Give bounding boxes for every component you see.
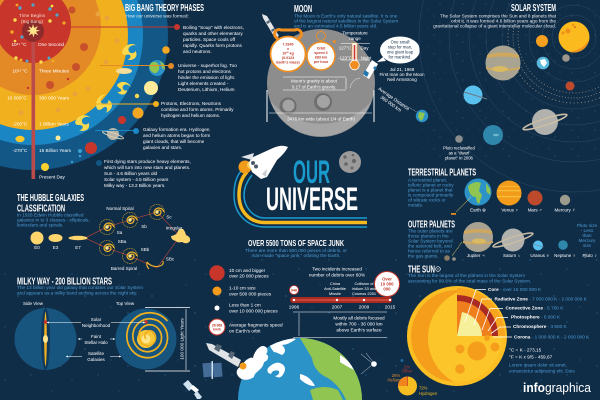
callout: moon gravity: 0.17 of Earth's gravity. [292,84,336,90]
text: solar system description: gravitational collapse of a giant interstellar molecular cloud. [433,24,556,28]
labels: Uranus ♅ [530,253,550,258]
labels: Saturn ♄ [503,253,521,258]
callout: debris altitude: Mostly all debris focused [333,316,385,320]
text: moon description [294,14,398,28]
icon: mass weight: 7.3349 [282,42,294,46]
legend: debris sizes: 1-10 cm size [229,286,256,290]
description: telluric planet or rocky [408,182,454,188]
text: phase two: hinder the emission of light. [178,75,235,80]
labels: Pluto ♇ [583,253,597,258]
timeline: debris incidents: number of debris over 60% [309,272,365,278]
text: moon description: of the largest natural satellites in the Solar System [294,18,398,24]
layer labels: Chromosphere - 3 800 K [513,324,568,329]
heading: milky way: MILKY WAY - 200 BILLION STARS [17,276,112,288]
pie: sun composition: Hydrogen [419,391,438,396]
timeline labels: (Big Bang) [21,19,44,24]
legend: debris sizes: 10 cm and bigger [229,268,266,273]
timeline labels: °C [20,42,27,47]
wordmark: OUR [293,154,330,190]
timeline: debris incidents: 2007 [332,304,343,310]
text: phase three: Protons, Electrons, Neutrons [161,101,222,106]
labels: Earth ⊕ [470,208,486,212]
pie: sun composition: 72% [419,386,428,390]
text: milky way description [17,285,143,296]
diagram: side view [14,301,76,370]
text: phase two [178,63,237,92]
wordmark: UNIVERSE [266,181,358,217]
description: hence referred to as [408,248,451,254]
layer labels: Convective Zone - 5 700 K [506,306,564,310]
legend: debris sizes: Less than 1 cm [229,302,261,308]
timeline labels: 10 [11,42,17,47]
description [408,273,531,284]
panel: big bang timeline circles [0,0,170,180]
heading: TERRESTRIAL PLANETS [408,168,476,178]
particles [10,3,119,115]
callout: fragment speed [209,319,283,335]
labels: Mercury ☿ [555,208,575,212]
thermometer: Night [361,56,372,60]
icon: satellite panels [202,361,223,379]
text: pluto note: Pluto reclassified [443,146,475,150]
timeline: debris incidents: Collision of [354,281,374,286]
diagram: tuning fork: SBa [118,239,127,244]
text: first man: Jul 21, 1969 [390,67,415,72]
icon: small moon [339,151,361,173]
dimension: moon width: 3476 km wide (about 1/4 of Earth) [287,116,355,122]
timeline bar [32,42,35,179]
callout: fragment speed: on Earth's orbit [229,328,261,334]
timeline: debris incidents: China [330,281,341,286]
sun cutaway diagram [407,286,512,386]
heading: solar system: SOLAR SYSTEM [511,3,556,14]
diagram: side view: Side View [23,301,44,306]
thermometer [338,30,372,70]
diagram: tuning fork [30,204,190,271]
moon body [267,29,375,137]
icon: orbit speed: Orbit [317,46,326,50]
formulas: °C = K - 273,15 [509,348,542,352]
timeline: debris incidents: Anti-Satellite [324,286,346,291]
diagram: tuning fork: Sb [141,224,147,229]
note: pluto size: size [583,243,592,248]
phase connector lines [70,24,180,166]
description: metals. [408,202,423,208]
timeline: debris incidents: 10 000 [380,282,394,286]
timeline: debris incidents: Missile [329,291,341,296]
text: space junk description: There are more than 500,000 pieces of debris, or [245,248,347,253]
icon: shuttle [238,146,288,179]
callouts: solar neighborhood, halo, satellite galaxies: Solar [91,317,102,322]
pie: sun composition: 26% [392,373,400,378]
text: phase five [104,159,191,188]
text: phase one: Boiling "Soup" with electrons, [183,25,244,30]
icon: mass weight: x [287,47,289,51]
layer labels: Photosphere - 6 000 K [511,314,561,320]
labels: Mars ♂ [528,208,542,212]
orbits [419,0,600,192]
timeline labels: 41 [17,42,20,46]
layer labels: Core - over 15 000 000 K [488,287,542,292]
text: phase four: galaxies and stars. [143,145,182,150]
callout: debris altitude: above Earth's surface [336,328,382,332]
pie: sun composition: Helium [387,378,401,382]
panel: moon [267,4,398,137]
labels [467,253,597,258]
text: first man: Neil Armstrong [387,77,417,82]
diagram: tuning fork: E3 [53,245,59,250]
diagram: tuning fork: E7 [75,245,81,250]
panel: milky way [14,276,190,371]
description: those planets in the [408,234,449,238]
icon: mass weight [270,30,306,72]
text: hubble description: In 1926 Edwin Hubble classified [17,212,84,218]
text: phase two: Light elements created - [178,81,229,86]
panel: solar system [419,0,600,192]
text: phase four: and helium atoms began to form [143,133,210,138]
description: The outer planets are [408,228,453,234]
legend: debris sizes: over 500 000 pieces [229,292,272,296]
diagram: tuning fork: Normal Spiral [106,206,134,211]
heading: big bang theory phases: BIG BANG THEORY PHASES [125,3,204,14]
timeline: debris incidents: Iridium 33 and [352,286,376,291]
timeline: debris incidents: 000 [383,286,391,292]
text: first man [379,67,425,82]
timeline labels: One Second [38,42,64,47]
timeline labels: 300 000 Years [39,96,70,100]
icon: orbit speed: per hour [314,60,329,64]
text: first man: First man on the Moon [379,72,425,77]
planets [444,222,586,261]
pie: sun composition: Other [402,368,413,374]
text: phase five: Solar system - 4.5 Billion years [104,177,169,182]
text: phase four: giant clouds, that will become [143,139,205,144]
formulas: Lorem ipsum dolor sit amet, [509,362,567,368]
labels [470,208,575,212]
callout: fragment speed: km/h [213,328,221,332]
text: milky way description: The 13 billion year old galaxy that contains our Solar System [17,285,143,290]
speech bubble: One small [391,40,409,44]
timeline labels: 1 Billion Years [39,122,69,126]
icon: satellite [183,380,202,399]
layer labels: Corona - 1 000 000 K - 2 000 000 K [514,334,590,340]
diagram: tuning fork: Irregular [166,226,183,230]
note: pluto size [577,223,598,248]
text: phase three [161,101,234,118]
callouts: solar neighborhood, halo, satellite galaxies: Galaxies [87,357,106,362]
layer labels: Radiative Zone - 7 000 000 K - 2 000 000 K [494,296,588,302]
timeline: debris incidents: 2015 [385,304,396,310]
text: phase one: and neutrons. [183,49,212,54]
heading: hubble: CLASSIFICATION [17,204,65,214]
text: phase one: quarks and other elementary [183,31,243,36]
panel: hubble classification [17,193,190,271]
callout: fragment speed: 28 968 [212,324,222,328]
icon: mass weight: (0.0123 [282,56,294,60]
text: phase four [143,127,210,150]
callouts: solar neighborhood, halo, satellite galaxies: Satellite [88,351,104,356]
description: of silicate rocks or [408,198,446,202]
description: accounting for 99.8% of the total mass of the Solar System. [408,278,531,284]
callout: debris altitude: within 700 - 36 000 km [335,322,383,326]
icon: sputnik [361,353,377,374]
heading: moon: MOON [294,4,312,15]
rocket trails [234,170,367,227]
text: pluto note: as a "dwarf [449,150,470,156]
asteroid belt [508,28,600,104]
heading: THE SUN [408,264,435,276]
note: pluto size: Mercury [579,238,596,243]
callouts: solar neighborhood, halo, satellite galaxies: Faint [91,334,102,339]
timeline labels: Present Day [39,174,66,180]
timeline labels: 12 [18,68,21,72]
description [408,228,453,258]
icon: mass weight: 10²² kg [282,52,294,56]
description: planet is a planet that [408,188,453,192]
legend: debris sizes [209,265,278,314]
labels: Venus ♀ [501,208,519,212]
heading: big bang theory phases [125,3,204,18]
sun [558,22,590,52]
heading: hubble [17,193,84,214]
text: space junk description: man-made "space junk," orbiting the Earth. [251,253,341,258]
timeline: debris incidents: 2009 [359,304,370,310]
diagram: top view [116,301,180,370]
callouts: solar neighborhood, halo, satellite galaxies: Stellar Halo [84,340,108,345]
text: phase five: which will turn into new stars and planets. [104,165,190,170]
title: our universe [234,146,367,227]
description: Solar System beyond [408,238,453,244]
thermometer: Day [360,46,369,50]
text: phase four: Galaxy formation era. Hydrogen [143,127,210,132]
text: pluto note [443,146,475,160]
timeline: debris incidents: 1996 [289,304,300,310]
callout: debris altitude [293,312,387,338]
heading: OUTER PALNETS [408,220,455,230]
callout: moon gravity [283,77,346,90]
heading: hubble: THE HUBBLE GALAXIES [17,193,84,204]
formulas [509,348,575,374]
text: hubble description [17,212,90,228]
text: solar system description: The Solar System comprises the Sun and 8 planets that [440,14,557,18]
formulas: °F = K x 9/5 - 459,67 [509,354,553,360]
icon: orbit speed: speed 3 [314,51,328,55]
text: phase five: Milky way - 13.2 Billion years. [104,183,165,188]
note: pluto size: than [582,233,592,238]
text: phase five: First dying stars produce heavy elements, [104,159,191,164]
thermometer: range [349,36,361,41]
text: space junk description [245,248,347,258]
timeline: debris incidents: Over [382,276,392,282]
timeline: debris incidents: Two incidents increased [312,266,362,272]
text: milky way description: and appears as a milky band arching across the night sky. [17,290,137,296]
text: moon description: and is an estimated 4.5 billion years old. [294,24,377,28]
diagram: tuning fork: E0 [34,245,40,250]
timeline labels: 10 000°C [7,96,27,100]
label: average distance: Average Distance [377,86,411,112]
diagram: top view: Top View [116,301,135,306]
diagram: tuning fork: Barred Spiral [111,266,137,271]
icon: big bang starburst [26,24,40,38]
timeline: debris incidents: Cosmos 2251 [352,291,376,296]
text: phase three: hydrogen and helium atoms. [161,113,220,118]
description [408,178,454,208]
timeline labels: 10 [12,68,18,74]
description: is composed primarily [408,192,454,198]
text: phase two: Deuterium, Lithium, Helium [178,87,235,92]
panel: terrestrial planets [408,168,575,215]
planets [451,178,570,215]
timeline: debris incidents: 948 [291,288,297,292]
timeline labels: 15 Billion Years [39,148,72,153]
text: pluto note: planet" in 2006 [445,156,474,160]
note: pluto size: - Less [581,228,594,233]
text: phase two: Universe - superhot fog. Too [178,63,237,68]
callouts: solar neighborhood, halo, satellite galaxies: Neighborhood [82,323,111,328]
text: phase five: Sun - 4.6 Billion years old [104,171,158,176]
speech bubble: step for man, [388,44,412,50]
icon: mass weight: Earth's mass) [276,60,301,64]
text: phase one [183,25,244,54]
layer labels [488,287,590,340]
description: the gas giants. [408,254,438,258]
panel: the sun [407,264,592,395]
diagram: tuning fork: SBb [141,247,150,252]
thermometer: 127°C [339,46,352,50]
text: phase one: rapidly. Quarks form protons [183,43,242,48]
text: phase three: combine and form atoms. Primarily [161,107,234,112]
timeline labels: Three Minutes [39,68,70,74]
diagram: tuning fork: SBc [166,256,175,262]
legend: debris sizes: over 20 000 pieces [229,274,269,278]
diagram: tuning fork: Sa [117,230,123,235]
text: phase one: particles. Space cools off [183,37,236,42]
heading: space junk: OVER 5500 TONS OF SPACE JUNK [248,238,345,248]
timeline labels: °C [21,68,28,74]
dimension: 100 000 light years [145,308,190,371]
diagram: tuning fork: Sc [166,214,172,220]
dimension: 100 000 light years: 100 000 Light Years [180,318,184,360]
text: solar system description [433,14,557,28]
icon: orbit speed: 683 km [315,56,327,60]
timeline labels: -270°C [13,148,28,153]
blue band galaxies and planets [15,44,170,171]
formulas: consectetur adipiscing elit. Duis [509,368,575,374]
logo: infographica: infographica [523,380,592,395]
note: pluto size: Pluto size [577,223,598,228]
icon: tiny earth [416,110,428,122]
panel: outer planets [408,220,598,261]
text: phase two: hot protons and electrons [178,69,232,74]
description: A terrestrial planet, [408,178,447,182]
text: solar system description: orbit it. It was formed 4.6 billion years ago from the [451,18,556,24]
labels: Jupiter ♃ [467,253,485,258]
icon: astronaut [350,60,378,88]
icon: apollo rocket [262,14,279,38]
illustration: launching rocket [206,343,268,380]
timeline labels: Time Begins [19,13,46,18]
callout: moon gravity: Moon's gravity is about [291,78,338,84]
callouts: solar neighborhood, halo, satellite galaxies [47,317,145,362]
timeline labels: -200°C [13,122,28,126]
text: hubble description: lenticulars and spirals. [17,222,63,228]
text: hubble description: galaxies in to 3 classes - ellipticals, [17,218,90,222]
thermometer: -123°C [338,56,353,60]
callout: fragment speed: Average fragments speed [229,322,283,328]
labels: Neptune ♆ [554,253,576,258]
timeline: debris incidents [289,266,400,310]
icon: orbit speed [307,32,336,70]
legend: debris sizes: over 10 000 000 pieces [229,308,278,314]
label: average distance: 360 000 km [379,95,402,113]
planets [455,35,574,145]
speech bubble [377,36,420,64]
timeline labels [7,13,72,180]
illustration: earth [238,337,362,400]
speech bubble: for mankind. [388,54,412,60]
speech bubble: one giant leap [387,50,414,54]
pie: sun composition [387,359,438,396]
description: The Sun is the largest of the planets in the Solar System [408,273,525,278]
heading: big bang theory phases: How our universe was formed: [126,14,189,18]
text: moon description: The Moon is Earth's only natural satellite. It is one [294,14,398,18]
thermometer: Temperature [342,30,368,36]
description: the asteroid belt, and [408,244,452,248]
pie: sun composition: 2% [404,364,410,370]
